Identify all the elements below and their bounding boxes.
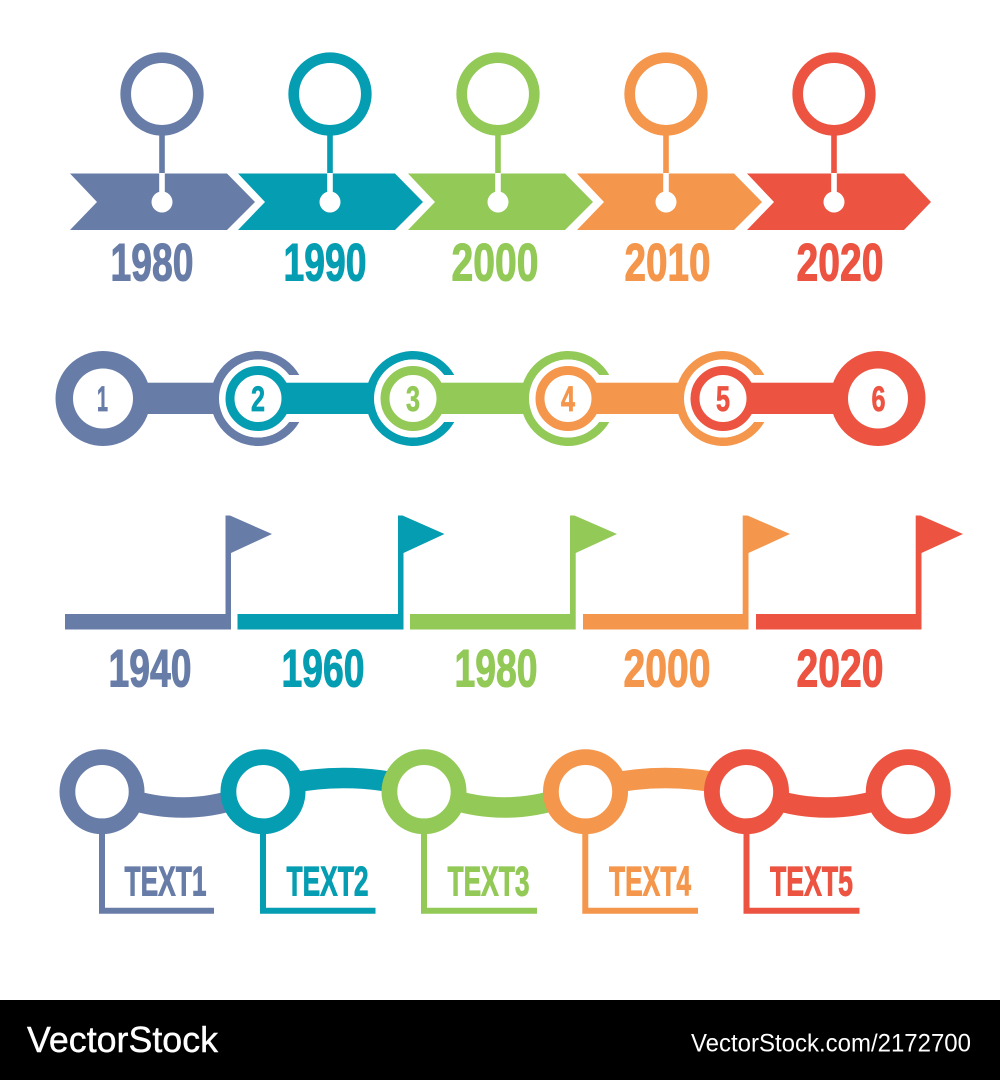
node 5: 5 (716, 380, 730, 419)
flag 2000 (583, 516, 790, 698)
text 3 node (389, 757, 537, 911)
flag 1940: 1940 (108, 640, 192, 698)
arrow segment 2010: 2010 (624, 234, 710, 292)
footer url: VectorStock.com/2172700 (691, 1030, 971, 1058)
footer bar (0, 1000, 1000, 1080)
text 5 node: TEXT5 (770, 858, 853, 904)
text 4 node (551, 757, 698, 911)
flag 1960 (238, 516, 444, 698)
node 1 (56, 351, 150, 446)
flag 2020 (756, 516, 963, 698)
flag 1960: 1960 (282, 640, 364, 698)
arrow segment 2000: 2000 (452, 234, 538, 292)
text 2 node: TEXT2 (286, 858, 368, 904)
flag 1940 (65, 516, 272, 698)
node 6 (830, 351, 926, 446)
timeline 2: numbered linked rings (56, 351, 926, 446)
node 5 (676, 351, 764, 446)
connector bars (103, 383, 878, 414)
wavy connectors (125, 778, 885, 808)
flag 2020: 2020 (796, 640, 884, 698)
text 1 node (67, 757, 214, 911)
text 3 node: TEXT3 (448, 858, 530, 904)
flag 1980 (410, 516, 617, 698)
timeline 1: arrows with pins (70, 58, 931, 293)
arrow segment 2000 (408, 58, 593, 293)
arrow segment 1980: 1980 (110, 234, 194, 292)
timeline 4: wavy line with text labels (67, 757, 943, 911)
arrow segment 2010 (577, 58, 762, 293)
node 1: 1 (97, 380, 108, 419)
node 4: 4 (561, 380, 575, 419)
end node (874, 757, 943, 826)
arrow segment 2020 (747, 58, 931, 293)
footer logo: VectorStock (27, 1019, 219, 1060)
timeline 3: flags (65, 516, 963, 698)
flag 2000: 2000 (624, 640, 710, 698)
arrow segment 1980 (70, 58, 255, 293)
node 3 (366, 351, 454, 446)
node 2: 2 (251, 380, 265, 419)
node 4 (521, 351, 609, 446)
arrow segment 1990 (238, 58, 423, 293)
text 4 node: TEXT4 (609, 858, 691, 904)
arrow segment 2020: 2020 (796, 234, 884, 292)
text 2 node (228, 757, 376, 911)
text 5 node (712, 757, 860, 911)
text 1 node: TEXT1 (124, 858, 206, 904)
node 2 (211, 351, 299, 446)
flag 1980: 1980 (454, 640, 538, 698)
node 6: 6 (872, 380, 886, 419)
arrow segment 1990: 1990 (284, 234, 366, 292)
node 3: 3 (406, 380, 420, 419)
